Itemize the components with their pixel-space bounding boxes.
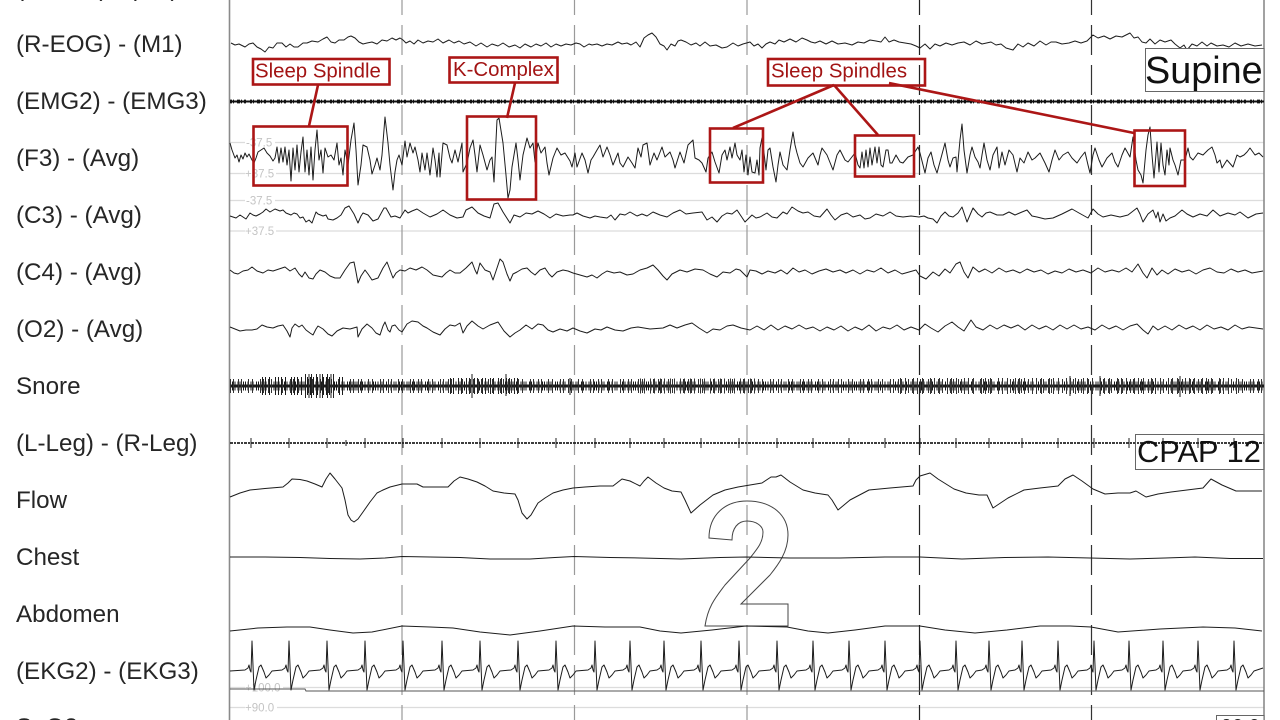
annotation: sleep spindles: Sleep Spindles — [771, 60, 907, 82]
annotation: K-complex — [450, 58, 558, 200]
channel labels: Chest — [16, 544, 79, 571]
trace: EKG — [230, 641, 1263, 690]
trace: C4 — [230, 259, 1263, 283]
scale gridlines and values: -37.5 — [246, 138, 272, 150]
watermark: sleep stage number 2 — [705, 501, 788, 626]
annotation: K-complex: K-Complex — [453, 59, 554, 81]
annotation: sleep spindle: Sleep Spindle — [255, 60, 381, 82]
channel labels: (F3) - (Avg) — [16, 145, 139, 172]
channel labels: (C4) - (Avg) — [16, 259, 142, 286]
trace: Snore — [230, 374, 1264, 398]
channel labels: Abdomen — [16, 601, 120, 628]
channel labels: Snore — [16, 373, 81, 400]
channel labels: (C3) - (Avg) — [16, 202, 142, 229]
scale gridlines and values: +100.0 — [245, 682, 280, 694]
scale gridlines and values: +37.5 — [245, 168, 274, 180]
scale gridlines and values: +37.5 — [245, 226, 274, 238]
trace: Abdomen — [230, 626, 1262, 635]
channel labels: (EKG2) - (EKG3) — [16, 658, 199, 685]
trace: C3 — [230, 203, 1263, 223]
annotation: sleep spindles — [710, 59, 1185, 186]
trace: F3 — [230, 117, 1263, 198]
channel labels: (EMG2) - (EMG3) — [16, 88, 207, 115]
body position tag: Supine: Supine — [1145, 50, 1263, 92]
scale gridlines and values: +90.0 — [245, 702, 274, 714]
scale gridlines and values — [230, 137, 1264, 714]
trace: Flow — [230, 473, 1262, 522]
scale gridlines and values: -37.5 — [246, 196, 272, 208]
trace: EMG noise band — [230, 100, 1264, 102]
channel labels: (R-EOG) - (M1) — [16, 31, 183, 58]
channel labels — [16, 0, 207, 720]
trace: oxygen saturation — [230, 689, 1264, 691]
trace: O2 — [230, 320, 1263, 337]
trace: R-EOG — [231, 33, 1262, 52]
channel labels: (L-Leg) - (R-Leg) — [16, 430, 197, 457]
channel labels: Flow — [16, 487, 68, 514]
annotation: sleep spindle — [253, 59, 390, 186]
trace: Chest — [230, 556, 1263, 559]
trace: leg movement — [230, 438, 1264, 448]
pressure tag: CPAP 12: CPAP 12 — [1137, 434, 1261, 469]
channel labels: (O2) - (Avg) — [16, 316, 143, 343]
